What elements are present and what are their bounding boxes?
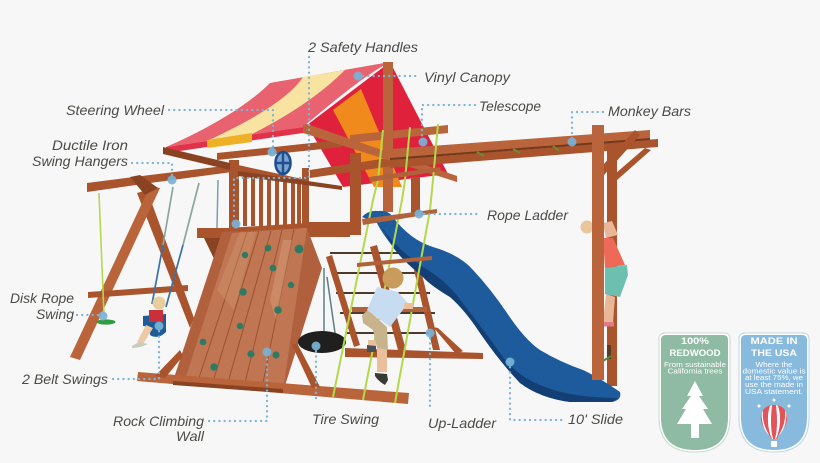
badge: 100% Redwood: 100% xyxy=(681,336,710,347)
fence and deck xyxy=(197,160,350,267)
icon: tree xyxy=(677,381,712,438)
playset illustration xyxy=(70,62,658,404)
label: 2 Safety Handles: 2 Safety Handles xyxy=(307,39,418,55)
badge: 100% Redwood: REDWOOD xyxy=(670,348,721,359)
label: 10' Slide: 10' Slide xyxy=(568,411,623,427)
badge: Made in the USA: MADE IN xyxy=(750,336,798,347)
label: Telescope xyxy=(418,98,541,146)
label: 2 Belt Swings xyxy=(21,322,163,387)
label: Steering Wheel xyxy=(66,102,276,156)
badge: Made in the USA: use the made in xyxy=(745,382,803,389)
monkey bars front post xyxy=(592,125,604,380)
label: Rope Ladder: Rope Ladder xyxy=(487,207,569,223)
label: Tire Swing xyxy=(312,342,379,427)
monkey bars xyxy=(390,130,658,386)
swing beam xyxy=(87,165,232,192)
up-ladder xyxy=(326,245,483,359)
base beam xyxy=(137,343,409,404)
label: Up-Ladder xyxy=(426,328,497,431)
label: Ductile Iron Swing Hangers: Ductile Iron xyxy=(52,137,128,153)
label: Ductile Iron Swing Hangers: Swing Hangers xyxy=(32,153,128,169)
boy climbing xyxy=(362,268,413,385)
label: Tire Swing: Tire Swing xyxy=(312,411,379,427)
badge: Made in the USA: domestic value is xyxy=(742,368,806,376)
badge: Made in the USA: USA statement. xyxy=(745,389,803,396)
label: Steering Wheel: Steering Wheel xyxy=(66,102,165,118)
canopy top xyxy=(166,62,390,153)
belt swing with baby xyxy=(132,183,199,348)
posts xyxy=(350,62,420,235)
steering wheel xyxy=(276,152,290,174)
label: Monkey Bars xyxy=(568,103,691,146)
label: 10' Slide xyxy=(506,358,623,427)
badge: Made in the USA: THE USA xyxy=(751,348,797,359)
label: 2 Safety Handles xyxy=(232,39,418,228)
label: Up-Ladder: Up-Ladder xyxy=(428,415,497,431)
label: Disk Rope Swing xyxy=(10,290,108,322)
label: Disk Rope Swing: Disk Rope xyxy=(10,290,74,306)
third swing chain xyxy=(217,180,218,228)
icon: hot air balloon xyxy=(758,398,790,447)
label: Vinyl Canopy xyxy=(354,69,511,85)
roof beams xyxy=(163,124,457,182)
badge: 100% Redwood: California trees xyxy=(668,368,723,376)
label: Monkey Bars: Monkey Bars xyxy=(608,103,691,119)
badge: Made in the USA xyxy=(739,333,809,452)
label: Vinyl Canopy: Vinyl Canopy xyxy=(424,69,511,85)
badge: 100% Redwood xyxy=(659,333,730,452)
rope ladder xyxy=(333,124,441,403)
label: Rope Ladder xyxy=(414,207,569,223)
label: Ductile Iron Swing Hangers xyxy=(32,137,176,184)
tire swing xyxy=(298,268,346,353)
climbing wall xyxy=(173,228,322,392)
badge: Made in the USA: Where the xyxy=(756,362,793,369)
label: Rock Climbing Wall: Wall xyxy=(176,428,205,444)
label: Rock Climbing Wall xyxy=(113,348,272,444)
girl climbing xyxy=(580,220,628,326)
a-frame xyxy=(70,175,194,360)
badge: 100% Redwood: From sustainable xyxy=(664,362,726,369)
label: Rock Climbing Wall: Rock Climbing xyxy=(113,413,204,429)
slide xyxy=(362,211,620,402)
label: Telescope: Telescope xyxy=(479,98,541,114)
label: Disk Rope Swing: Swing xyxy=(36,306,74,322)
canopy side panel xyxy=(307,62,448,187)
label: 2 Belt Swings: 2 Belt Swings xyxy=(21,371,108,387)
disk rope swing xyxy=(96,193,116,325)
badge: Made in the USA: at least 75%, we xyxy=(745,375,803,382)
